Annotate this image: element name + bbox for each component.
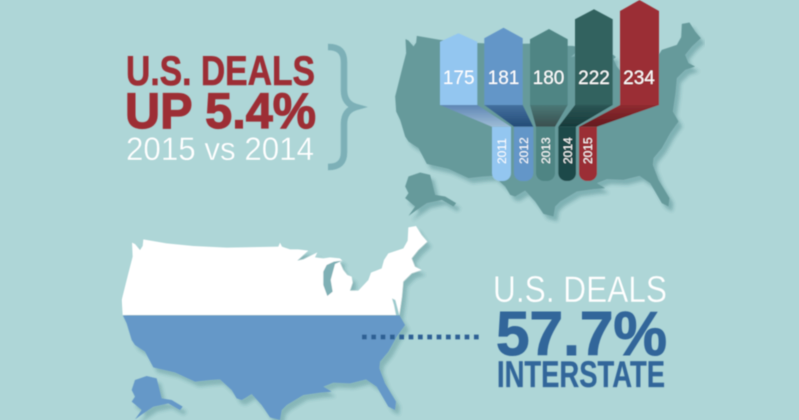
dotted leader line <box>362 335 482 339</box>
map: upper U.S. with deal columns <box>395 22 705 221</box>
brace <box>328 47 356 167</box>
column 2014: 222 <box>578 68 610 89</box>
column 2015 <box>579 0 659 181</box>
column 2013 <box>530 29 568 181</box>
column 2014: 2014 <box>561 137 575 164</box>
column 2015: 234 <box>623 68 655 89</box>
stat: 57.7%: 57.7% <box>496 300 667 369</box>
label: interstate: INTERSTATE <box>497 354 665 395</box>
column 2012 <box>484 28 533 181</box>
column 2013: 2013 <box>539 137 553 164</box>
column 2012: 2012 <box>517 137 531 164</box>
column 2011 <box>440 33 511 181</box>
heading: U.S. deals up 5.4%: UP 5.4% <box>125 83 316 139</box>
column 2013: 180 <box>533 68 564 89</box>
column 2011: 175 <box>443 68 475 89</box>
heading: U.S. deals: U.S. DEALS <box>493 269 667 310</box>
column 2014 <box>558 9 613 181</box>
column 2012: 181 <box>488 68 519 89</box>
map: lower U.S. split white and blue <box>122 226 431 420</box>
infographic content <box>122 0 705 420</box>
heading: U.S. deals up 5.4% <box>125 47 316 139</box>
subheading: 2015 vs 2014: 2015 vs 2014 <box>126 131 314 167</box>
heading: U.S. deals up 5.4%: U.S. DEALS <box>126 47 315 94</box>
column 2015: 2015 <box>581 137 595 164</box>
column 2011: 2011 <box>495 138 509 164</box>
